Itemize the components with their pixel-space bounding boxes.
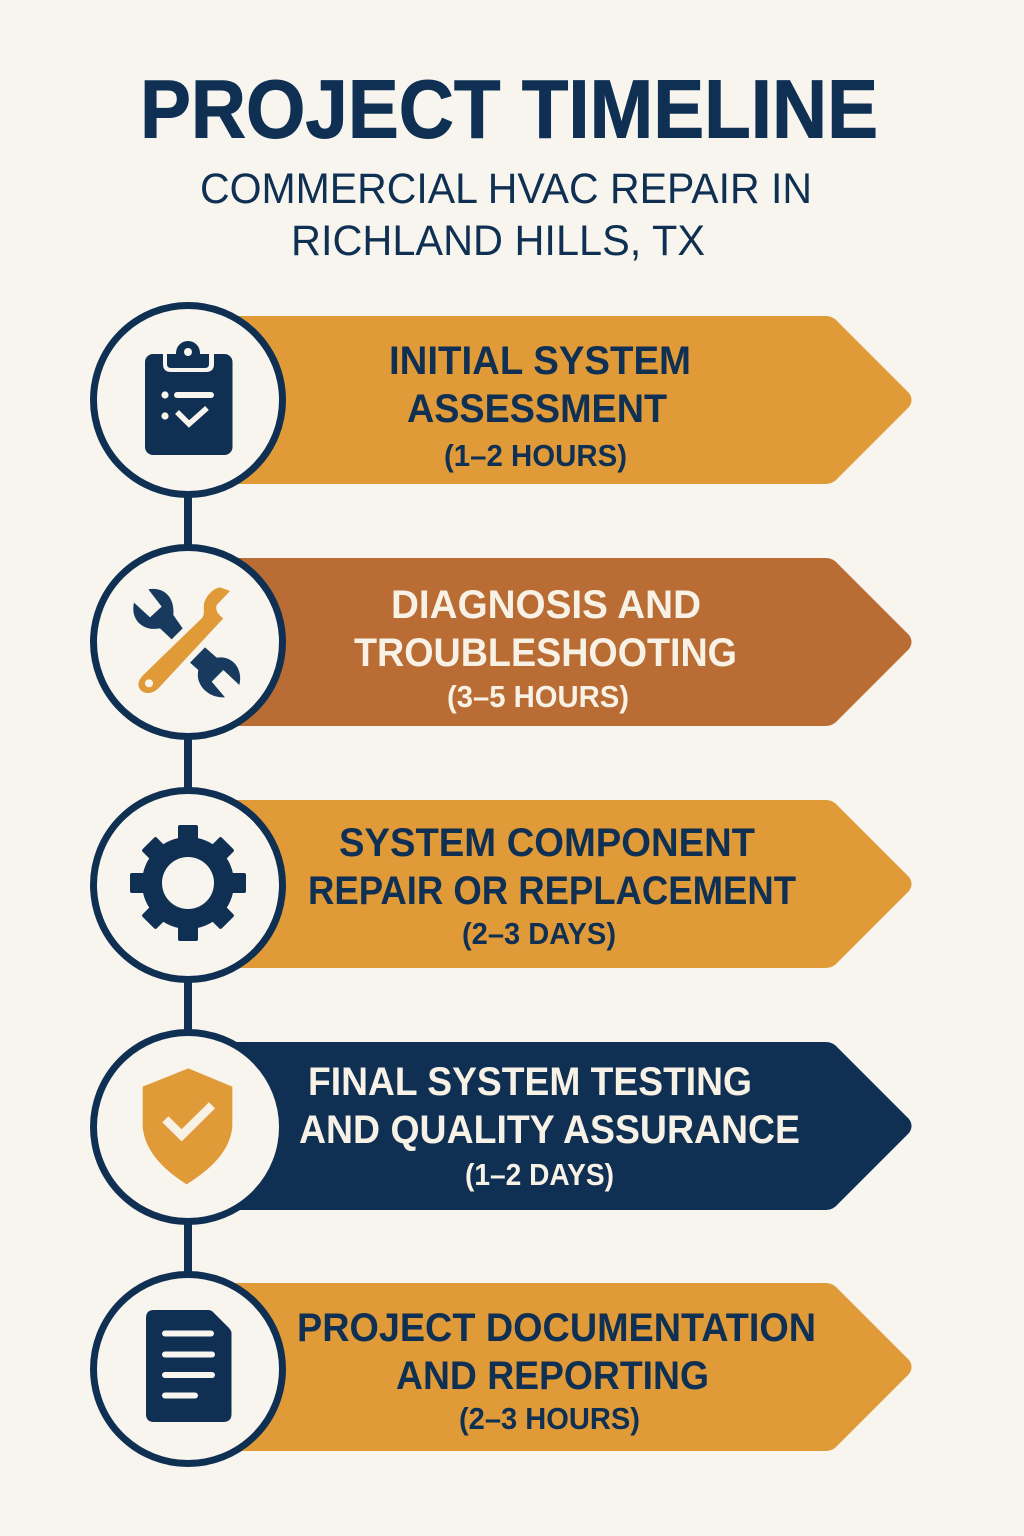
step 5 text: (2–3 HOURS) [459, 1401, 640, 1436]
step 1 text: ASSESSMENT [407, 387, 667, 431]
icon: document [146, 1310, 232, 1422]
icon: clipboard [145, 341, 232, 455]
step 2 text: DIAGNOSIS AND [391, 583, 701, 627]
step 4: final system testing [94, 1032, 912, 1222]
circle 2 [94, 548, 282, 736]
step 4 text: FINAL SYSTEM TESTING [308, 1060, 752, 1104]
step 2 text: TROUBLESHOOTING [354, 631, 737, 675]
title: PROJECT TIMELINE [140, 62, 878, 156]
circle 4 [94, 1032, 282, 1222]
icon: wrench and spanner [133, 587, 240, 697]
arrow banner 2 [225, 558, 912, 726]
step 3 text: REPAIR OR REPLACEMENT [308, 869, 796, 913]
circle 3 [94, 790, 282, 980]
step 3 text: SYSTEM COMPONENT [339, 821, 755, 865]
step 2 text: (3–5 HOURS) [447, 679, 629, 714]
step 3 text [308, 821, 796, 951]
subtitle: COMMERCIAL HVAC REPAIR IN [200, 165, 812, 213]
arrow banner 4 [225, 1042, 912, 1210]
timeline connector lines [184, 490, 192, 1280]
step 4 text [299, 1060, 800, 1192]
step 1: initial system assessment [94, 306, 912, 494]
arrow banner 1 [225, 316, 912, 484]
step 4 text: AND QUALITY ASSURANCE [299, 1108, 800, 1152]
arrow banner 5 [225, 1283, 912, 1451]
step 2: diagnosis and troubleshooting [94, 548, 912, 736]
step 2 text [354, 583, 737, 714]
step 1 text: INITIAL SYSTEM [389, 339, 691, 383]
step 1 text: (1–2 HOURS) [444, 438, 627, 473]
arrow banner 3 [225, 800, 912, 968]
circle 5 [94, 1274, 282, 1464]
step 3: component repair or replacement [94, 790, 912, 980]
subtitle: RICHLAND HILLS, TX [291, 217, 705, 265]
icon: gear [130, 825, 246, 941]
step 1 text [389, 339, 691, 473]
step 5 text [297, 1306, 816, 1436]
icon: shield with check [143, 1068, 232, 1184]
step 5 text: PROJECT DOCUMENTATION [297, 1306, 816, 1350]
step 5: documentation and reporting [94, 1274, 912, 1464]
step 4 text: (1–2 DAYS) [465, 1157, 614, 1192]
step 5 text: AND REPORTING [396, 1354, 709, 1398]
step 3 text: (2–3 DAYS) [462, 916, 616, 951]
subtitle [200, 165, 812, 265]
circle 1 [94, 306, 282, 494]
